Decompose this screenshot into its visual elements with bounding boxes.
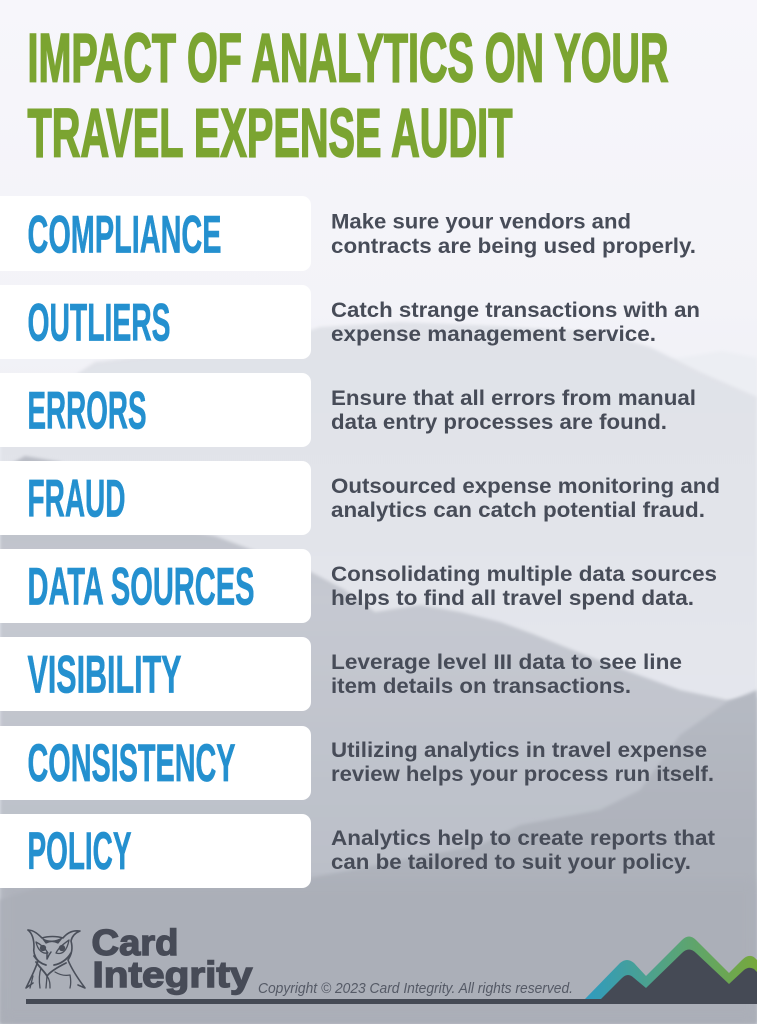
panel: outliers: OUTLIERS [28,294,170,352]
panel: visibility [0,637,682,711]
panel: policy: can be tailored to suit your policy. [331,851,691,874]
panel: outliers: Catch strange transactions with an [331,299,700,322]
panel: data sources: helps to find all travel spend data. [331,587,694,610]
panel: visibility: item details on transactions. [331,675,631,698]
panel: errors: data entry processes are found. [331,411,667,434]
panel: data sources: DATA SOURCES [28,558,254,616]
panel: errors: Ensure that all errors from manual [331,387,696,410]
panel: consistency: Utilizing analytics in travel expense [331,739,707,762]
brand name: Card Integrity: Integrity [92,954,253,995]
panel: visibility: VISIBILITY [28,646,182,704]
panel: errors: ERRORS [28,382,146,440]
title [28,20,668,172]
icon: mountain logo with footer line [26,936,757,1004]
panel: data sources: Consolidating multiple data sources [331,563,717,586]
brand name: Card Integrity [92,922,253,995]
panel: consistency: review helps your process run itself. [331,763,714,786]
panel: policy: POLICY [28,822,132,881]
panel: compliance: COMPLIANCE [28,206,222,264]
panel: compliance: contracts are being used properly. [331,235,696,258]
panel: outliers [0,285,700,359]
panel: visibility: Leverage level III data to see line [331,651,682,674]
panel: consistency: CONSISTENCY [28,734,236,793]
panel: outliers: expense management service. [331,323,656,346]
panel: policy: Analytics help to create reports that [331,827,715,850]
panel: fraud [0,461,720,535]
copyright: Copyright © 2023 Card Integrity. All rights reserved. [258,981,573,997]
panel: fraud: FRAUD [28,470,126,528]
panel: compliance: Make sure your vendors and [331,210,631,234]
icon: owl logo [26,930,85,988]
panel: compliance [0,196,696,271]
panel: fraud: analytics can catch potential fraud. [331,499,705,522]
brand name: Card Integrity: Card [92,922,178,963]
panel: consistency [0,726,714,800]
panel: data sources [0,549,717,623]
panel: errors [0,373,696,447]
panel: policy [0,814,715,888]
panel: fraud: Outsourced expense monitoring and [331,475,720,498]
